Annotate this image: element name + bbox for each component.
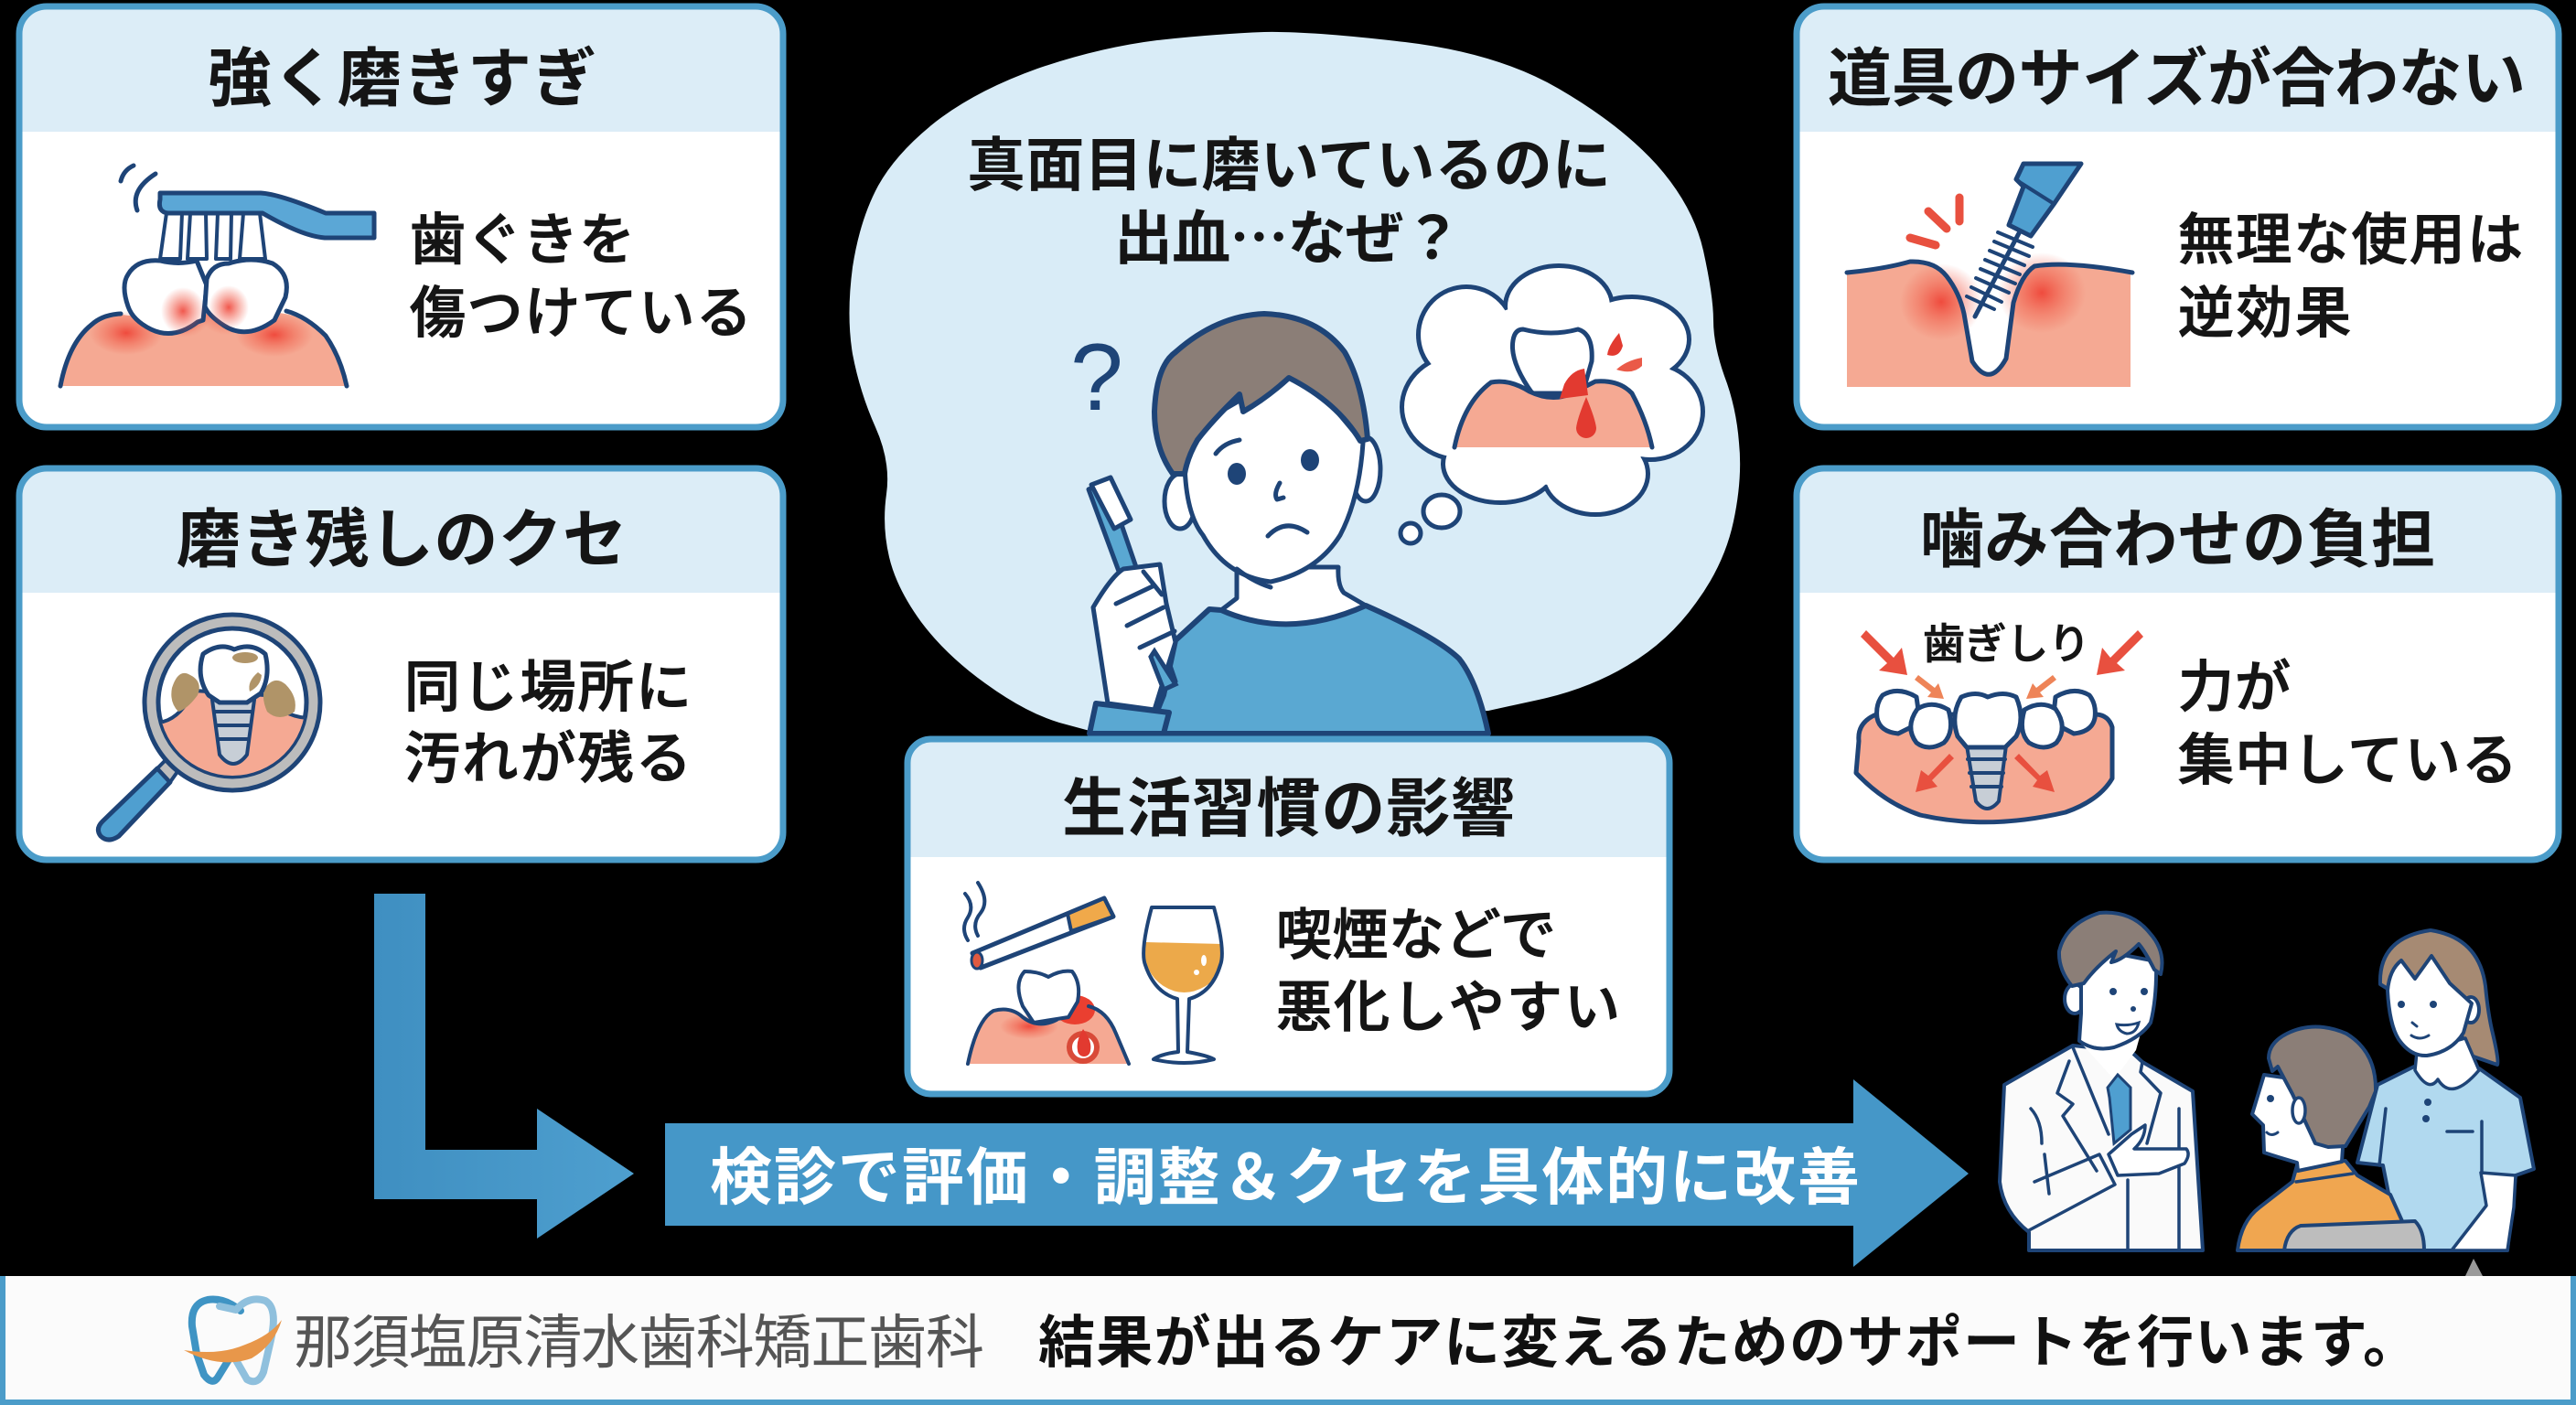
icon: magnifier on implant with plaque bbox=[98, 615, 320, 840]
text block: 歯ぐきを bbox=[410, 209, 635, 271]
arrow: main arrow with message bbox=[665, 1079, 1969, 1267]
text block: 悪化しやすい bbox=[1276, 976, 1620, 1038]
icon: wine glass bbox=[1143, 907, 1223, 1063]
label: 歯ぎしり: 歯ぎしり bbox=[1923, 620, 2090, 668]
text: support message: 結果が出るケアに変えるためのサポートを行います。 bbox=[1038, 1312, 2420, 1375]
panel: 噛み合わせの負担 bbox=[1797, 468, 2559, 860]
illustration: nurse bbox=[2357, 930, 2534, 1250]
text block: 逆効果 bbox=[2178, 282, 2351, 344]
icon: question mark: ? bbox=[1070, 325, 1123, 431]
illustration: patient from behind bbox=[2238, 1026, 2424, 1250]
text block: 集中している bbox=[2178, 729, 2517, 791]
panel: central question bubble bbox=[849, 32, 1740, 734]
heading: question: 真面目に磨いているのに bbox=[967, 133, 1611, 198]
icon: thought bubble with bleeding gum bbox=[1401, 268, 1701, 543]
text: arrow message: 検診で評価・調整＆クセを具体的に改善 bbox=[710, 1143, 1860, 1213]
text block: 無理な使用は bbox=[2178, 209, 2523, 271]
panel: 磨き残しのクセ bbox=[19, 468, 783, 860]
heading: 磨き残しのクセ bbox=[177, 504, 627, 575]
logo: tooth mark bbox=[184, 1299, 282, 1381]
illustration: worried person with toothbrush bbox=[1089, 314, 1488, 734]
icon: interdental brush in gum gap bbox=[1847, 164, 2132, 387]
heading: 強く磨きすぎ bbox=[208, 43, 596, 114]
footer bar bbox=[0, 1276, 2576, 1405]
text block: 喫煙などで bbox=[1276, 904, 1556, 966]
text block: 傷つけている bbox=[410, 282, 752, 344]
text: clinic name: 那須塩原清水歯科矯正歯科 bbox=[294, 1310, 984, 1376]
icon: gum inflammation bbox=[968, 971, 1129, 1064]
heading: question: 出血…なぜ？ bbox=[1114, 192, 1462, 276]
panel: 道具のサイズが合わない bbox=[1797, 6, 2559, 427]
text block: 同じ場所に bbox=[404, 656, 692, 718]
small grey triangle bbox=[2465, 1259, 2483, 1276]
panel: 生活習慣の影響 bbox=[907, 739, 1669, 1094]
panel: 強く磨きすぎ bbox=[19, 6, 783, 427]
illustration: doctor bbox=[2000, 913, 2203, 1250]
icon: cigarette bbox=[964, 883, 1113, 969]
heading: 噛み合わせの負担 bbox=[1920, 504, 2435, 575]
text block: 汚れが残る bbox=[404, 727, 692, 789]
arrow: left elbow arrow bbox=[374, 894, 634, 1239]
icon: teeth grinding with force arrows bbox=[1856, 620, 2143, 822]
icon: toothbrush on teeth and gums bbox=[60, 166, 374, 386]
text block: 力が bbox=[2178, 656, 2291, 718]
heading: 生活習慣の影響 bbox=[1062, 773, 1515, 844]
heading: 道具のサイズが合わない bbox=[1828, 43, 2526, 114]
red force arrows bbox=[1861, 630, 2143, 792]
